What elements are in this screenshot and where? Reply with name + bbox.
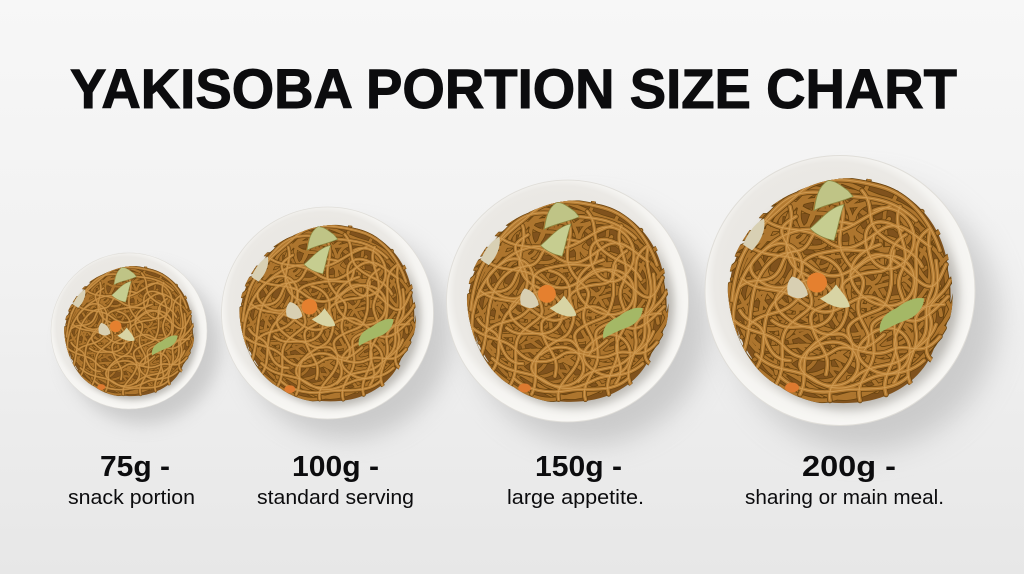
plate: 150g (434, 167, 709, 444)
label: 200g (745, 451, 944, 509)
plate: 100g (210, 196, 452, 439)
label: 200g: 200g - (802, 451, 896, 483)
label: 200g: sharing or main meal. (745, 487, 944, 509)
plate: 200g (691, 141, 998, 450)
label: 150g: large appetite. (507, 487, 644, 509)
label: 100g: 100g - (292, 451, 379, 483)
plate: 75g (43, 245, 220, 423)
label: 100g: standard serving (257, 487, 414, 509)
label: 75g: snack portion (68, 487, 195, 509)
label: 150g (507, 451, 644, 509)
label: 100g (257, 451, 414, 509)
title: YAKISOBA PORTION SIZE CHART (70, 57, 957, 120)
label: 75g: 75g - (100, 451, 170, 483)
label: 150g: 150g - (535, 451, 622, 483)
label: 75g (68, 451, 195, 509)
